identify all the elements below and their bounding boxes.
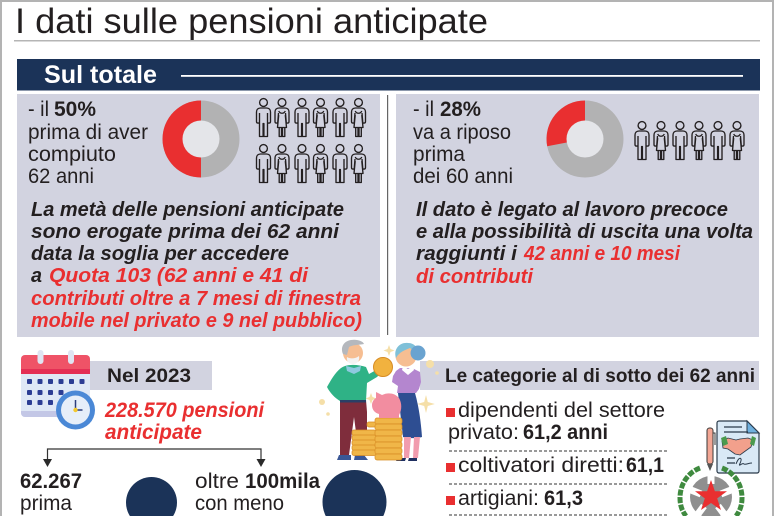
- icon: calendar with clock: [21, 350, 95, 430]
- icon: six people: [635, 122, 744, 160]
- text: explanation right: e alla possibilità di uscita una volta: [416, 221, 753, 243]
- text: 62.267 prima: 62.267: [20, 470, 82, 493]
- text: 228.570 pensioni anticipate: anticipate: [105, 420, 202, 444]
- text: 228.570 pensioni anticipate: 228.570 pensioni: [104, 398, 265, 422]
- illustration: elderly couple with savings: [319, 340, 439, 461]
- text: 62.267 prima: prima: [20, 492, 72, 515]
- text: il 50%: - il: [28, 98, 49, 121]
- item: coltivatori: [446, 454, 664, 477]
- icon: twelve people: [256, 99, 366, 182]
- text: explanation left: Quota 103 (62 anni e 41 di: [49, 265, 308, 287]
- text: il 28%: prima: [413, 143, 465, 166]
- item: artigiani: [446, 487, 583, 510]
- text: 62.267 prima: [20, 470, 82, 515]
- item: dipendenti: dipendenti del settore: [458, 399, 665, 422]
- text: explanation right: 42 anni e 10 mesi: [523, 243, 680, 265]
- text: oltre 100mila con meno: 100mila: [245, 470, 320, 493]
- sparkles: [319, 345, 439, 416]
- text: il 50%: [28, 98, 148, 188]
- text: il 50%: prima di aver: [28, 121, 148, 144]
- circle: first: [126, 477, 177, 516]
- text: il 50%: 62 anni: [28, 165, 94, 188]
- list: categories: [446, 399, 668, 515]
- heading: Nel 2023: Nel 2023: [107, 365, 191, 387]
- text: il 28%: dei 60 anni: [413, 165, 513, 188]
- woman: [392, 368, 421, 393]
- text: il 28%: 28%: [440, 98, 481, 121]
- panel: 50 percent: [17, 94, 380, 337]
- text: 228.570 pensioni anticipate: [104, 398, 265, 444]
- panel: 28 percent: [396, 94, 759, 337]
- item: coltivatori: 61,1: [626, 454, 664, 477]
- icon: contract document and pen: [707, 421, 759, 473]
- coin stacks: [352, 418, 402, 460]
- text: oltre 100mila con meno: [195, 470, 320, 515]
- text: explanation left: mobile nel privato e 9 nel pubblico): [31, 310, 362, 332]
- text: explanation right: [416, 199, 753, 288]
- arrows: split: [43, 449, 266, 467]
- text: explanation right: Il dato è legato al lavoro precoce: [416, 199, 728, 221]
- donut chart: 50 percent: [162, 100, 240, 178]
- text: explanation left: contributi oltre a 7 mesi di finestra: [31, 288, 361, 310]
- coin: [374, 358, 392, 376]
- item: artigiani: artigiani:: [458, 487, 539, 510]
- text: explanation left: data la soglia per accedere: [31, 243, 289, 265]
- text: il 50%: compiuto: [28, 143, 116, 166]
- circle: second: [322, 470, 386, 516]
- man: [340, 400, 367, 455]
- donut chart: 28 percent: [546, 100, 624, 178]
- text: explanation left: [31, 199, 362, 332]
- text: explanation left: sono erogate prima dei 62 anni: [31, 221, 339, 243]
- item: dipendenti: [446, 399, 665, 444]
- text: il 28%: - il: [413, 98, 434, 121]
- text: explanation left: a: [31, 265, 42, 287]
- item: coltivatori: coltivatori diretti:: [458, 454, 624, 477]
- text: explanation right: raggiunti i: [416, 243, 517, 265]
- piggy bank: [372, 392, 401, 418]
- text: explanation right: di contributi: [416, 266, 533, 288]
- item: artigiani: 61,3: [544, 487, 583, 510]
- heading bar: Sul totale: Sul totale: [44, 61, 157, 89]
- heading bar: Sul totale: [17, 59, 760, 90]
- heading: categories: [420, 361, 759, 390]
- item: dipendenti: privato:: [448, 421, 519, 444]
- item: dipendenti: 61,2 anni: [523, 421, 608, 444]
- text: il 28%: va a riposo: [413, 121, 511, 144]
- heading: categories: Le categorie al di sotto dei 62 anni: [445, 365, 755, 387]
- text: oltre 100mila con meno: oltre: [195, 470, 239, 493]
- title: I dati sulle pensioni anticipate: [15, 2, 488, 41]
- text: explanation left: La metà delle pensioni anticipate: [31, 199, 344, 221]
- heading: Nel 2023: [88, 361, 212, 390]
- icon: emblem of the Italian Republic: [680, 468, 742, 516]
- text: il 28%: [413, 98, 513, 188]
- text: oltre 100mila con meno: con meno: [195, 492, 284, 515]
- text: il 50%: 50%: [54, 98, 96, 121]
